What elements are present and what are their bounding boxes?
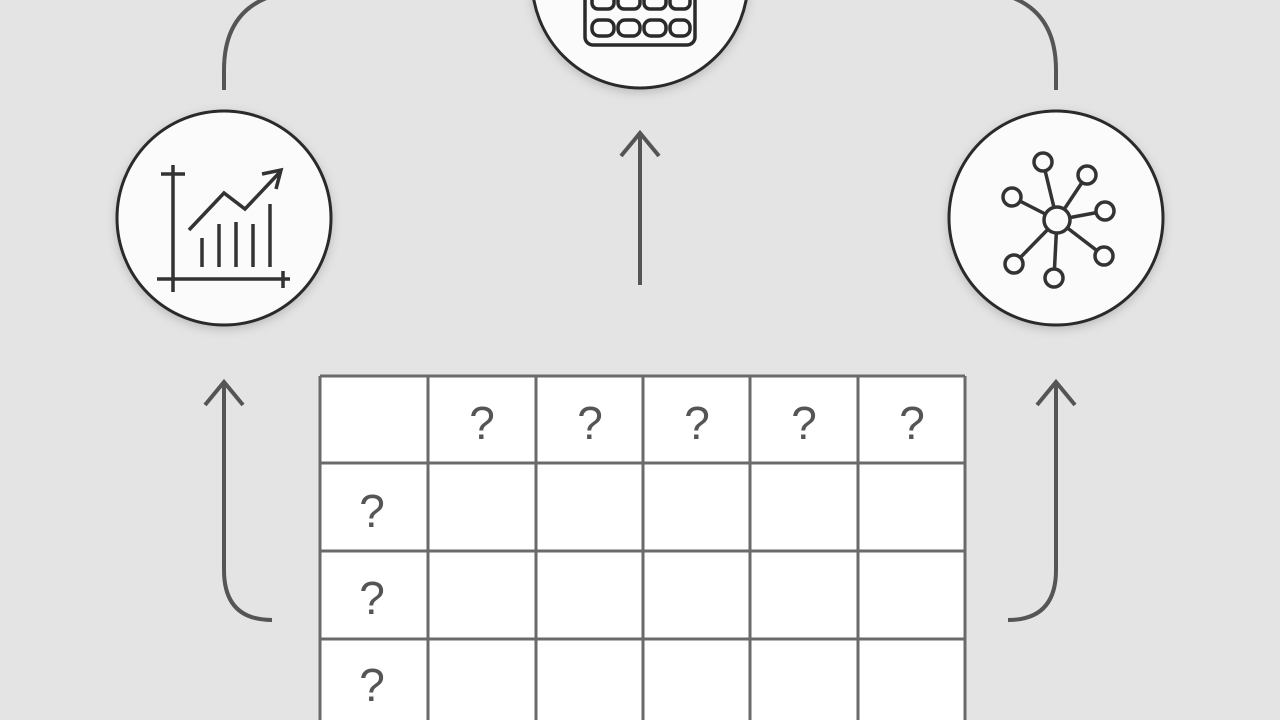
connector: left arc to top circle <box>224 0 275 90</box>
table: question matrix: ? <box>359 572 385 624</box>
table: question matrix: ? <box>684 397 710 449</box>
icon circle: left growth chart <box>117 111 331 325</box>
table: question matrix: ? <box>359 659 385 711</box>
arrow: right curved up <box>1008 382 1075 620</box>
table: question matrix: ? <box>469 397 495 449</box>
icon circle: top grid <box>532 0 748 88</box>
table: question matrix: ? <box>577 397 603 449</box>
arrow: center up <box>621 133 659 285</box>
icon circle: right network <box>949 111 1163 325</box>
table: question matrix <box>320 376 965 720</box>
arrow: left curved up <box>205 382 272 620</box>
table: question matrix: ? <box>791 397 817 449</box>
table: question matrix: ? <box>359 485 385 537</box>
connector: right arc to top circle <box>1005 0 1056 90</box>
table: question matrix: ? <box>899 397 925 449</box>
